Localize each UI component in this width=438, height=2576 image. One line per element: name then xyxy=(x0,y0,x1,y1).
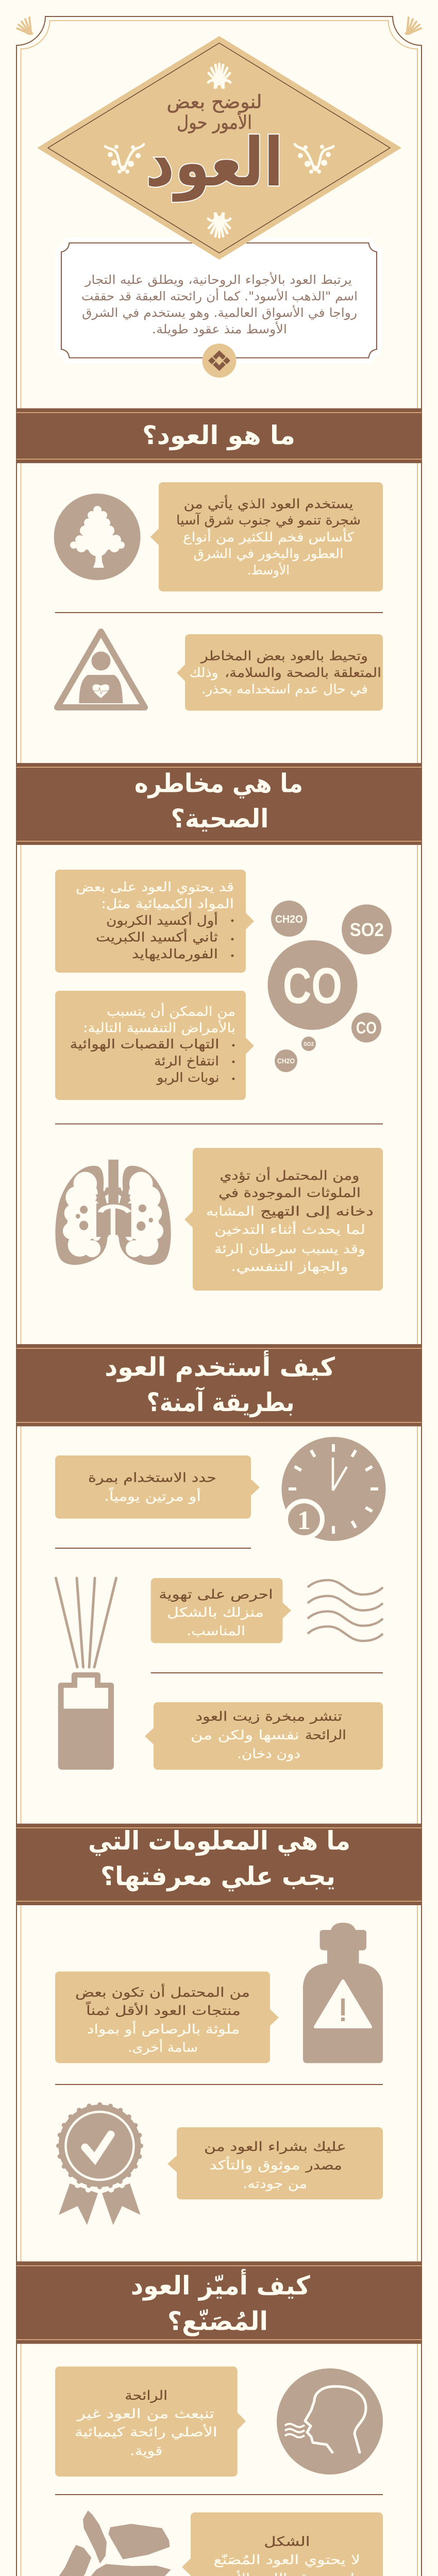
callout: health risks xyxy=(177,634,383,711)
section heading band xyxy=(16,2261,422,2344)
callout: trusted source: عليك بشراء العود من xyxy=(204,2139,346,2154)
callout: smoke pollutants: الملوثات الموجودة في xyxy=(218,1185,361,1200)
callout: smoke pollutants xyxy=(184,1148,383,1291)
callout: respiratory diseases: انتفاخ الرئة xyxy=(154,1054,219,1069)
section: spotting fake oud xyxy=(16,2261,422,2576)
icon: head smelling xyxy=(277,2368,383,2475)
section heading band: الصحية؟ xyxy=(171,804,269,834)
icon: chemical molecule bubbles: SO2 xyxy=(304,1041,314,1047)
callout: ventilation xyxy=(151,1578,291,1643)
section: what is oud xyxy=(16,408,422,711)
callout: limit use xyxy=(55,1455,260,1519)
subtitle xyxy=(167,92,262,133)
icon: chemical molecule bubbles: CH2O xyxy=(275,913,303,925)
icon: clock xyxy=(281,1437,385,1541)
callout: oud origin: العطور والبخور في الشرق xyxy=(194,546,343,562)
callout: trusted source: من جودته. xyxy=(243,2176,307,2191)
callout: smell xyxy=(55,2366,246,2477)
callout: smoke pollutants: المشابه xyxy=(206,1204,255,1219)
icon: reed diffuser xyxy=(56,1578,116,1770)
icon: warning bottle xyxy=(303,1923,383,2063)
intro text: يرتبط العود بالأجواء الروحانية، ويطلق عليه التجار xyxy=(85,272,352,287)
callout: oil burner: دون دخان. xyxy=(237,1747,300,1762)
callout: chemicals xyxy=(55,870,254,973)
icon: chemical molecule bubbles: CO xyxy=(356,1019,377,1037)
callout: oil burner: تنشر مبخرة زيت العود xyxy=(195,1709,342,1724)
panel: intro box xyxy=(61,243,377,358)
subtitle: الأمور حول xyxy=(177,111,252,133)
callout: health risks: المتعلقة بالصحة والسلامة، xyxy=(225,665,381,681)
section heading band xyxy=(16,408,422,463)
callout: smoke pollutants: دخانه إلى التهيج xyxy=(260,1204,374,1219)
callout: trusted source: مصدر xyxy=(305,2158,342,2173)
callout: limit use: حدد الاستخدام بمرة xyxy=(88,1470,216,1485)
callout: smell: الأصلي رائحة كيميائية xyxy=(75,2424,217,2439)
icon: lungs xyxy=(55,1160,171,1268)
callout: oud origin: شجرة تنمو في جنوب شرق آسيا xyxy=(176,512,361,528)
callout: health risks: وذلك xyxy=(190,665,218,681)
callout: chemicals: الفورمالديهايد xyxy=(132,946,218,962)
icon: shell ornament top xyxy=(208,64,230,88)
callout: oud origin: كأساس فخم للكثير من أنواع xyxy=(183,528,354,545)
callout: respiratory diseases: التهاب القصبات الهوائية xyxy=(70,1037,220,1052)
section: safe use xyxy=(16,1344,422,1770)
icon: intro medallion xyxy=(202,344,236,378)
callout: cheap products xyxy=(55,1972,279,2063)
icon: air waves xyxy=(308,1580,383,1641)
section heading band xyxy=(16,1344,422,1426)
callout: respiratory diseases xyxy=(55,991,254,1100)
intro text: اسم "الذهب الأسود". كما أن رائحته العبقة قد حققت xyxy=(81,288,358,303)
intro text: رواجا في الأسواق العالمية. وهو يستخدم في الشرق xyxy=(82,305,357,320)
section heading band: ما هي مخاطره xyxy=(134,769,303,799)
callout: ventilation: احرص على تهوية xyxy=(159,1587,273,1602)
callout: oud origin: يستخدم العود الذي يأتي من xyxy=(183,495,353,511)
intro text: الأوسط منذ عقود طويلة. xyxy=(152,321,287,336)
callout: chemicals: المواد الكيميائية مثل: xyxy=(101,896,234,911)
callout: chemicals: ثاني أكسيد الكبريت xyxy=(96,928,218,945)
title: العود xyxy=(145,123,283,202)
callout: trusted source: موثوق والتأكد xyxy=(209,2156,300,2173)
section heading band: المُصَنّع؟ xyxy=(167,2307,268,2337)
callout: oil burner xyxy=(145,1702,383,1770)
callout: cheap products: ملوثة بالرصاص أو بمواد xyxy=(87,2020,240,2037)
icon: chemical molecule bubbles: CH2O xyxy=(277,1057,295,1065)
icon: tree xyxy=(54,494,141,580)
icon: oud wood pieces xyxy=(51,2511,171,2576)
icon: shell ornament bottom xyxy=(208,213,230,237)
icon: clock: 1 xyxy=(297,1506,311,1535)
icon: chemical molecule bubbles xyxy=(268,901,392,1072)
callout: oil burner: نفسها ولكن من xyxy=(191,1727,299,1743)
callout: cheap products: منتجات العود الأقل ثمناً xyxy=(86,2002,241,2018)
callout: trusted source xyxy=(167,2127,383,2199)
callout: smoke pollutants: لما يحدث أثناء التدخين xyxy=(214,1221,365,1237)
callout: smoke pollutants: ومن المحتمل أن تؤدي xyxy=(220,1166,360,1183)
callout: oil burner: الرائحة xyxy=(305,1727,346,1742)
section: health risks xyxy=(16,763,422,1291)
callout: chemicals: قد يحتوي العود على بعض xyxy=(76,879,234,894)
icon: quality badge xyxy=(56,2103,144,2225)
section heading band xyxy=(16,1824,422,1905)
callout: smell: الرائحة xyxy=(125,2388,167,2403)
title diamond xyxy=(37,36,401,260)
callout: ventilation: منزلك بالشكل xyxy=(167,1605,264,1620)
callout: respiratory diseases: من الممكن أن يتسبب xyxy=(107,1003,235,1019)
callout: shape: لا يحتوي العود المُصَنّع xyxy=(213,2552,360,2568)
callout: shape: الشكل xyxy=(264,2534,310,2549)
callout: smell: تنبعث من العود غير xyxy=(76,2406,214,2421)
icon: chemical molecule bubbles: CO xyxy=(283,957,342,1014)
callout: cheap products: من المحتمل أن تكون بعض xyxy=(75,1984,250,2000)
callout: oud origin xyxy=(150,482,383,591)
section heading band: يجب علي معرفتها؟ xyxy=(100,1861,335,1892)
section heading band: بطريقة آمنة؟ xyxy=(146,1386,295,1418)
callout: chemicals: أول أكسيد الكربون xyxy=(106,911,218,928)
section heading band: كيف أميّز العود xyxy=(131,2269,311,2301)
section heading band: ما هي المعلومات التي xyxy=(88,1826,350,1856)
icon: scroll ornament left xyxy=(105,144,144,174)
callout: respiratory diseases: نوبات الربو xyxy=(156,1070,220,1085)
callout: health risks: وتحيط بالعود بعض المخاطر xyxy=(200,648,368,664)
section: what to know xyxy=(16,1824,422,2225)
callout: smoke pollutants: وقد يسبب سرطان الرئة xyxy=(214,1242,365,1257)
callout: cheap products: سامة أخرى. xyxy=(128,2039,198,2055)
callout: shape xyxy=(182,2512,383,2576)
callout: oud origin: الأوسط. xyxy=(247,562,290,578)
intro text xyxy=(81,272,358,336)
callout: ventilation: المناسب. xyxy=(187,1623,245,1638)
callout: smoke pollutants: والجهاز التنفسي. xyxy=(231,1259,348,1275)
section heading band: ما هو العود؟ xyxy=(142,420,295,451)
callout: limit use: أو مرتين يومياً. xyxy=(104,1487,201,1504)
section heading band xyxy=(16,763,422,845)
icon: warning triangle with person xyxy=(57,632,145,707)
section heading band: كيف أستخدم العود xyxy=(105,1350,335,1383)
subtitle: لنوضح بعض xyxy=(167,92,262,113)
icon: scroll ornament right xyxy=(295,144,333,174)
callout: health risks: في حال عدم استخدامه بحذر. xyxy=(201,682,368,697)
icon: chemical molecule bubbles: SO2 xyxy=(350,919,384,940)
callout: respiratory diseases: بالأمراض التنفسية التالية: xyxy=(83,1020,235,1036)
callout: smell: قوية. xyxy=(130,2444,162,2459)
